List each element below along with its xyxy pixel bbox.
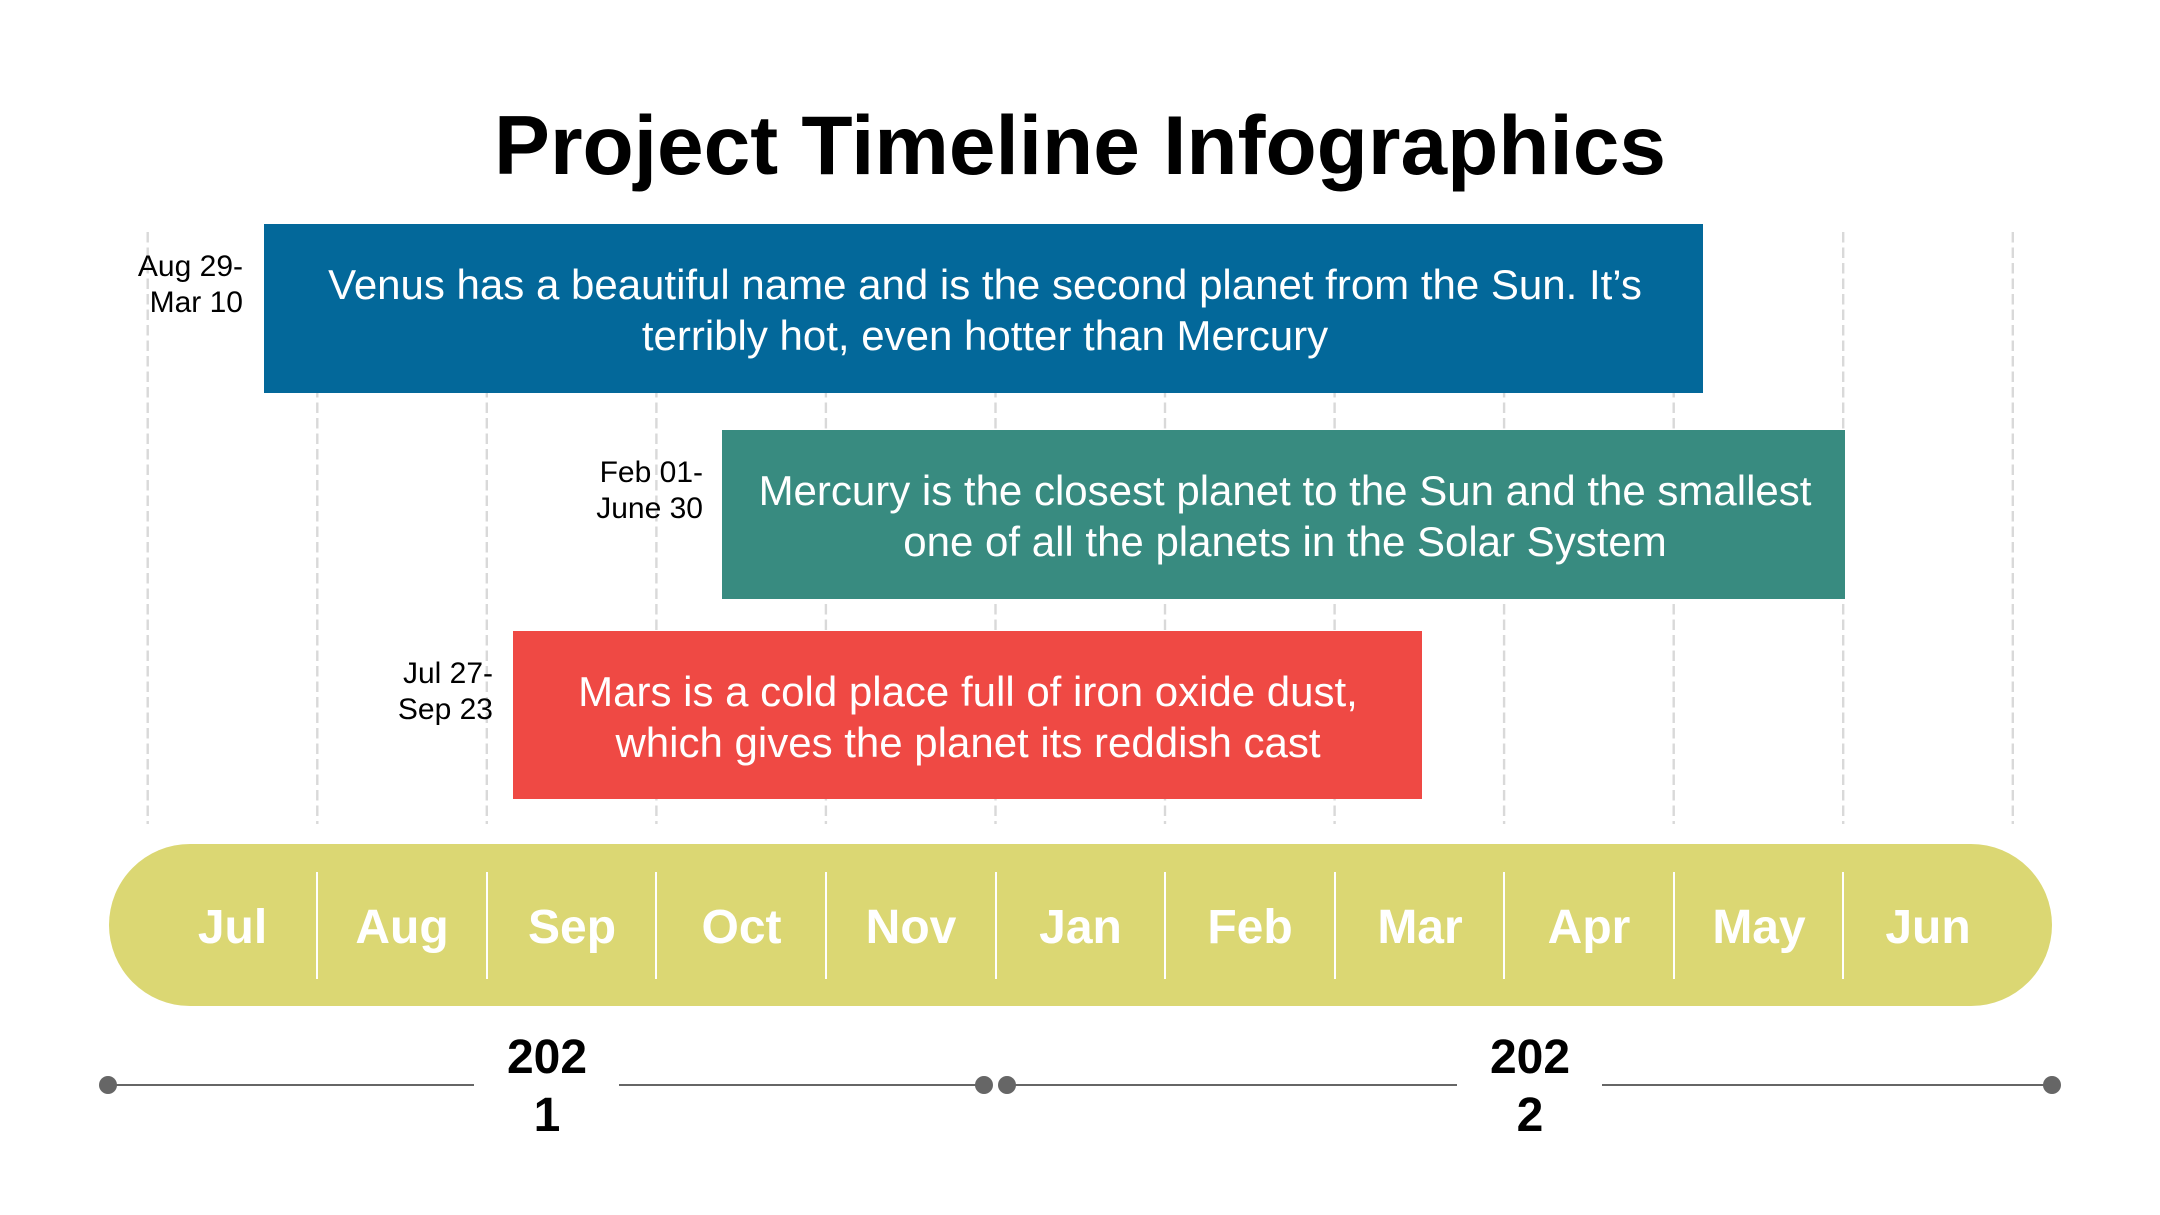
year label 2022 [1490, 1031, 1570, 1142]
panel: Mars task bar [513, 631, 1422, 799]
Venus description: Venus has a beautiful name and is the second planet from the Sun. It’s [328, 261, 1642, 308]
month axis bar [109, 844, 2052, 1006]
Mercury description: Mercury is the closest planet to the Sun and the smallest [759, 467, 1811, 514]
year bracket: 2021 [99, 1031, 993, 1142]
Mars date range: Jul 27- [403, 657, 493, 690]
month: Nov: Nov [866, 901, 956, 954]
Mercury date range: June 30 [596, 492, 703, 525]
month: Feb: Feb [1207, 901, 1293, 954]
year label 2022: 2 [1517, 1089, 1543, 1142]
Mars date range [398, 657, 493, 726]
Mars description: which gives the planet its reddish cast [615, 718, 1321, 766]
Mars description [578, 668, 1358, 766]
year label 2021 [507, 1031, 587, 1142]
year label 2021: 1 [534, 1089, 560, 1142]
month: Jan: Jan [1039, 901, 1122, 954]
panel: Mercury task bar [722, 430, 1845, 599]
month: Aug: Aug [355, 901, 449, 954]
month: Jul: Jul [198, 901, 267, 954]
Mars description: Mars is a cold place full of iron oxide dust, [578, 668, 1358, 715]
month: Oct: Oct [701, 901, 782, 954]
month: Jun: Jun [1885, 901, 1971, 954]
panel: Venus task bar [264, 224, 1703, 393]
Venus description: terribly hot, even hotter than Mercury [642, 312, 1328, 358]
Mercury date range [596, 456, 703, 525]
title: Project Timeline Infographics [494, 98, 1666, 192]
Venus date range: Mar 10 [150, 286, 243, 319]
Venus date range: Aug 29- [138, 250, 243, 283]
Venus description [328, 261, 1642, 358]
Mercury date range: Feb 01- [600, 456, 703, 489]
month: May: May [1712, 901, 1806, 954]
month: Apr: Apr [1548, 901, 1630, 954]
year label 2022: 202 [1490, 1031, 1570, 1084]
Venus date range [138, 250, 243, 319]
year label 2021: 202 [507, 1031, 587, 1084]
year bracket: 2022 [998, 1031, 2061, 1142]
Mars date range: Sep 23 [398, 693, 493, 726]
Mercury description: one of all the planets in the Solar System [903, 518, 1667, 564]
Mercury description [759, 467, 1812, 564]
month: Sep: Sep [528, 901, 616, 954]
month: Mar: Mar [1377, 901, 1463, 954]
